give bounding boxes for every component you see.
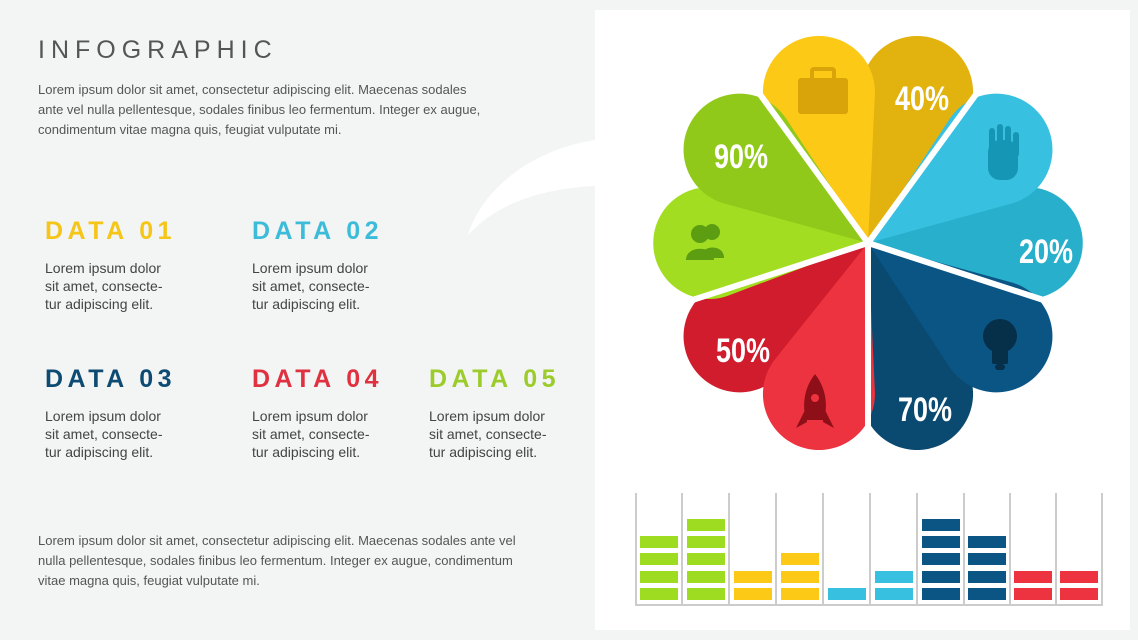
data 02 [252, 217, 383, 312]
data 01: sit amet, consecte- [45, 278, 162, 294]
bar chart [635, 493, 1103, 605]
icon: bulb [983, 319, 1017, 370]
data 04: sit amet, consecte- [252, 426, 370, 442]
icon: people [686, 224, 724, 260]
flower chart [653, 21, 1083, 466]
data 02: DATA 02 [252, 217, 383, 245]
data 03: sit amet, consecte- [45, 426, 162, 442]
data 03: Lorem ipsum dolor [45, 408, 161, 424]
icon: briefcase [798, 69, 848, 114]
percentages: 50% [716, 332, 770, 370]
bottom paragraph: Lorem ipsum dolor sit amet, consectetur adipiscing elit. Maecenas sodales ante vel nulla pellentesque, sodales finibus leo fermentum. Integer ex augue, condimentum vitae magna quis, feugiat vulputate mi. [38, 533, 516, 588]
data 01: Lorem ipsum dolor [45, 260, 161, 276]
data 02: tur adipiscing elit. [252, 296, 360, 312]
data 02: sit amet, consecte- [252, 278, 370, 294]
data 03: DATA 03 [45, 365, 176, 393]
data 05: sit amet, consecte- [429, 426, 546, 442]
right white panel [595, 10, 1130, 630]
data 05: Lorem ipsum dolor [429, 408, 545, 424]
data 05: DATA 05 [429, 365, 560, 393]
percentages: 70% [898, 391, 952, 429]
intro paragraph: Lorem ipsum dolor sit amet, consectetur adipiscing elit. Maecenas sodales ante vel nulla pellentesque, sodales finibus leo fermentum. Integer ex augue, condimentum vitae magna quis, feugiat vulputate mi. [38, 82, 480, 137]
data 05 [429, 365, 560, 460]
data 02: Lorem ipsum dolor [252, 260, 368, 276]
data 04: Lorem ipsum dolor [252, 408, 368, 424]
data 01: tur adipiscing elit. [45, 296, 153, 312]
data 03 [45, 365, 176, 460]
percentages: 40% [895, 80, 949, 118]
data 01 [45, 217, 176, 312]
data 04 [252, 365, 383, 460]
percentages: 90% [714, 138, 768, 176]
icon: hand [988, 124, 1019, 180]
white curve [468, 140, 595, 235]
data 04: tur adipiscing elit. [252, 444, 360, 460]
percentages: 20% [1019, 233, 1073, 271]
percentages [714, 80, 1073, 429]
data 03: tur adipiscing elit. [45, 444, 153, 460]
title: INFOGRAPHIC [38, 36, 278, 64]
data 04: DATA 04 [252, 365, 383, 393]
data 01: DATA 01 [45, 217, 176, 245]
icon: rocket [796, 374, 834, 428]
data 05: tur adipiscing elit. [429, 444, 537, 460]
